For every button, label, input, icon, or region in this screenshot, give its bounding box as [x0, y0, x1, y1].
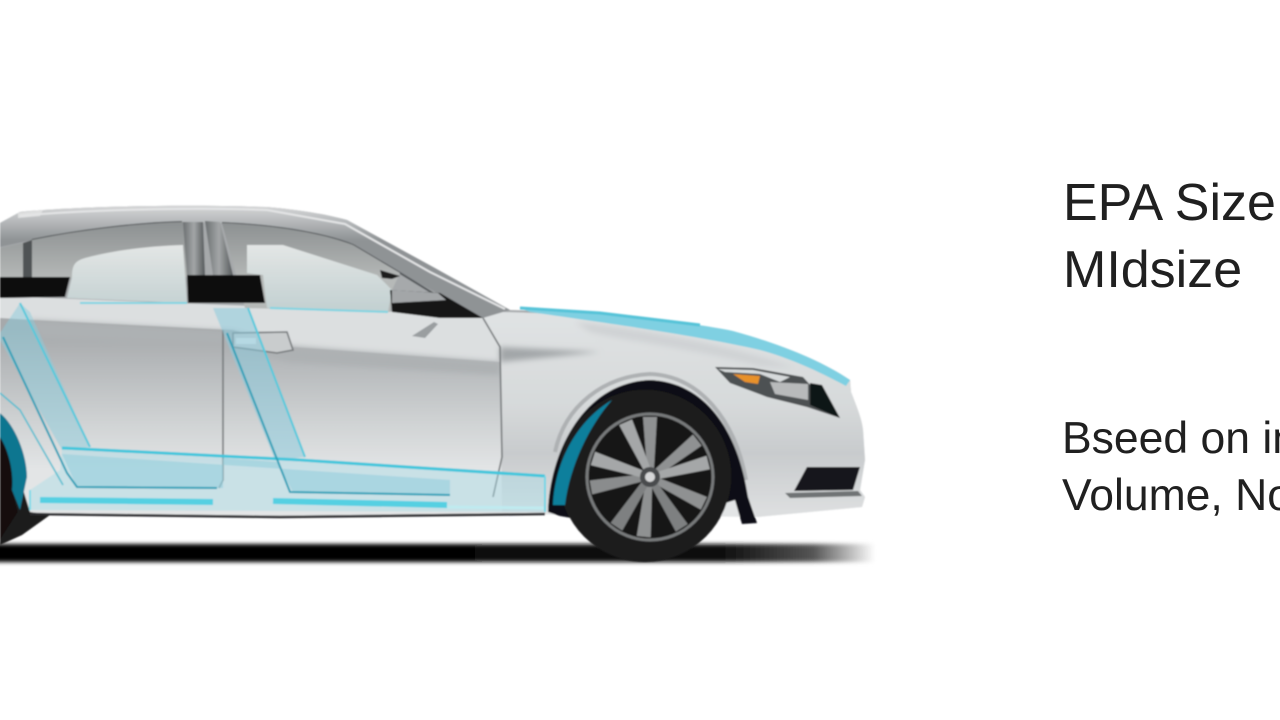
shoulder band — [0, 296, 500, 362]
blue structure highlights — [0, 303, 850, 512]
front fender and hood — [483, 312, 865, 517]
side windows — [0, 221, 400, 312]
door seams and handle — [30, 318, 545, 517]
ground shadow — [0, 544, 875, 562]
headlight — [715, 367, 840, 418]
body silhouette — [0, 206, 865, 518]
side mirror — [390, 290, 483, 338]
rear wheel arch — [0, 413, 27, 540]
rear tyre — [0, 425, 50, 545]
blue wheel liner — [553, 400, 612, 505]
front fog vent — [785, 467, 862, 498]
heading: midsize: MIdsize — [1063, 241, 1242, 299]
front wheel — [559, 390, 731, 562]
car — [0, 206, 865, 562]
heading: EPA size: EPA Size — [1063, 174, 1276, 232]
front wheel arch — [548, 380, 757, 530]
roof — [0, 206, 510, 318]
